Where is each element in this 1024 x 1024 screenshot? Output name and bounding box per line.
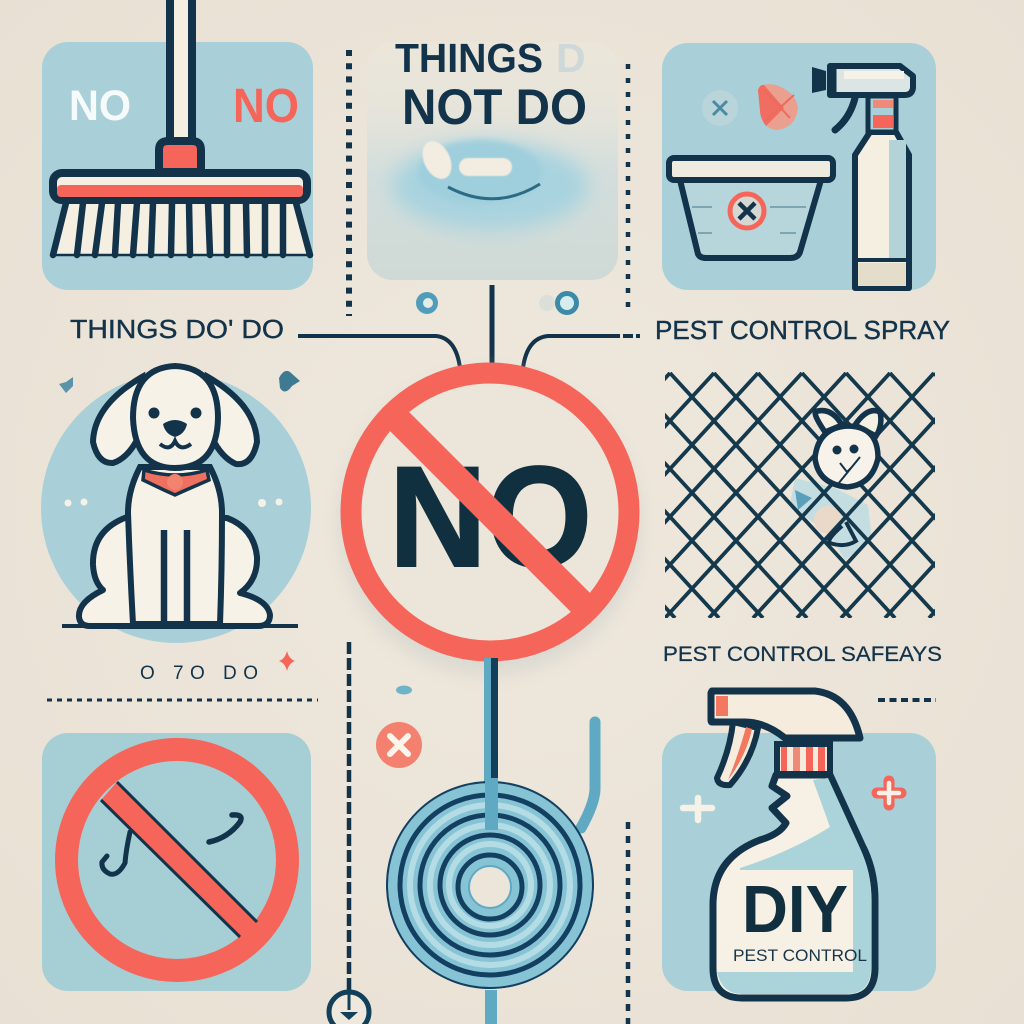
panel: broom — [42, 0, 313, 290]
trigger — [717, 722, 758, 785]
spray head — [711, 691, 860, 738]
dog ears — [93, 377, 142, 463]
label: pest control safeways: PEST CONTROL SAFEAYS — [663, 643, 942, 666]
spray bottle — [812, 66, 913, 288]
dog head — [133, 366, 218, 468]
bottle liquid — [717, 778, 871, 994]
ring — [66, 750, 288, 970]
heading: not do: NOT DO — [402, 79, 587, 135]
hook pipe — [581, 722, 595, 828]
dog collar — [143, 470, 209, 495]
dog legs — [164, 530, 187, 624]
icon: x badge — [376, 722, 422, 768]
no symbol — [340, 373, 640, 674]
spiral rings — [387, 782, 593, 988]
no symbol: NO — [389, 438, 592, 597]
panel: dog — [41, 366, 311, 643]
pipe overlap — [485, 778, 498, 830]
faded letter: D — [556, 35, 586, 81]
label: o to do — [140, 651, 295, 684]
connector lines — [298, 285, 640, 368]
hook left — [102, 832, 130, 874]
broom head — [53, 173, 307, 200]
sparkle dots — [64, 498, 282, 507]
decoration marks — [59, 371, 300, 393]
panel: spray and container — [662, 43, 936, 290]
text: white NO: NO — [69, 82, 131, 130]
plastic container — [669, 158, 833, 258]
bottle body — [713, 775, 875, 998]
icon: small blue mark — [396, 686, 412, 694]
icon: bottom circle — [329, 992, 369, 1024]
panel: coil — [387, 658, 595, 1024]
label: pest control spray: PEST CONTROL SPRAY — [655, 315, 950, 345]
wire mesh — [665, 372, 935, 618]
plus: red — [877, 781, 901, 805]
heading: things: THINGS — [395, 35, 543, 81]
broom socket — [159, 141, 201, 172]
collar — [777, 744, 830, 774]
slash — [101, 782, 257, 937]
plus: white — [683, 798, 712, 820]
dog face — [148, 408, 202, 447]
animal head — [815, 411, 881, 487]
label: o to do: O 7O DO — [140, 663, 258, 684]
water blob — [392, 136, 588, 230]
ground line — [62, 624, 298, 628]
pest control label text: PEST CONTROL — [733, 946, 867, 965]
panel: prohibition sign — [42, 733, 311, 991]
panel: mesh with animal — [665, 372, 935, 618]
panel: DIY spray — [662, 691, 936, 998]
icon: blue dots — [416, 292, 576, 314]
dog haunches — [79, 517, 270, 626]
dog body — [128, 467, 222, 624]
label: things do do: THINGS DO' DO — [70, 314, 284, 344]
animal body — [790, 478, 872, 560]
broom handle — [170, 0, 192, 141]
animal tail — [829, 522, 856, 545]
straight pipe — [484, 658, 498, 1024]
icon: red blob — [758, 84, 798, 130]
icon: small x — [702, 90, 738, 126]
DIY label text: DIY — [742, 872, 848, 947]
hook right — [209, 815, 241, 842]
panel: things not do — [367, 35, 618, 280]
text: red NO: NO — [233, 80, 299, 133]
broom bristles — [52, 203, 311, 255]
